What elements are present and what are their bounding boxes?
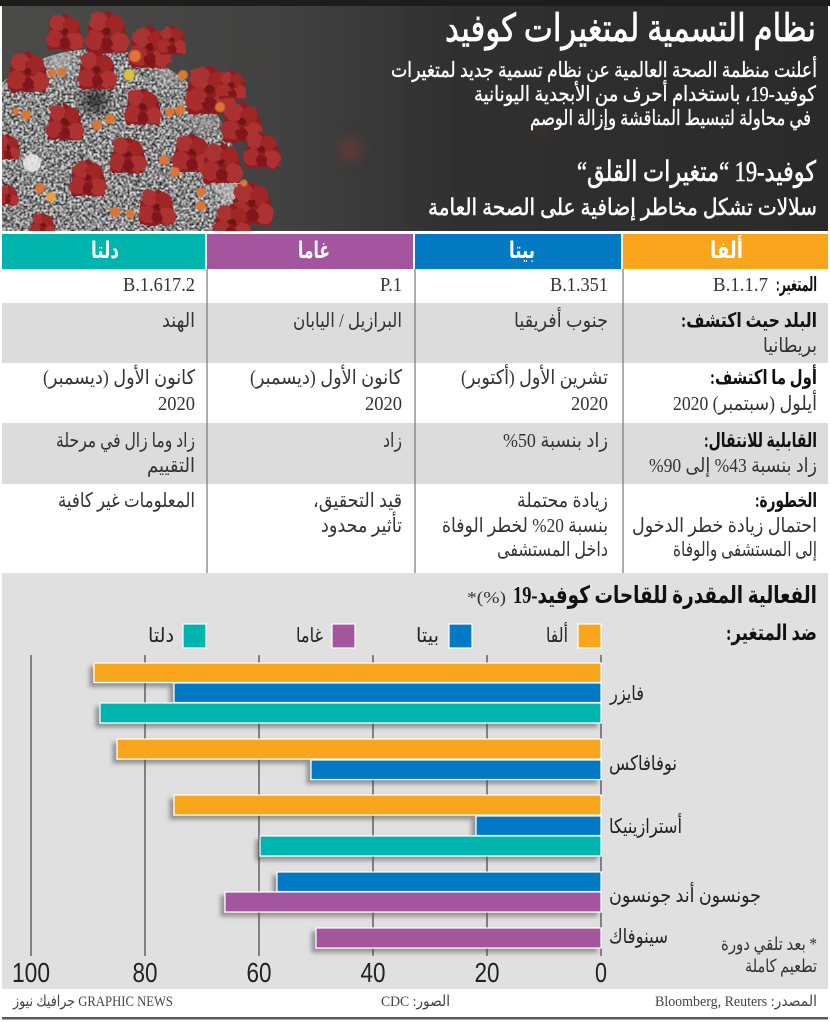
row: severity: داخل المستشفى [497, 539, 608, 561]
row: severity [58, 490, 817, 562]
header: alpha: ألفا [710, 234, 743, 263]
row: variant [123, 274, 817, 296]
footnote [721, 934, 817, 977]
subheading: كوفيد-19 “متغيرات القلق“ [577, 157, 817, 188]
row: transmissibility: زاد [383, 430, 402, 452]
legend: دلتا [148, 625, 174, 647]
row: severity: بنسبة 20% لخطر الوفاة [442, 515, 608, 537]
legend [148, 620, 817, 648]
unit note: *(%) [467, 588, 506, 607]
header: gamma [207, 234, 413, 269]
axis numbers: 100 [12, 957, 50, 988]
axis numbers: 60 [246, 957, 272, 988]
photo credit: الصور: CDC [381, 994, 450, 1010]
vaccine labels [609, 683, 761, 948]
vaccine labels: نوفافاكس [609, 753, 677, 775]
legend: ألفا [546, 622, 568, 647]
header: delta [2, 234, 205, 269]
footer [2, 994, 828, 1020]
row: first detected: كانون الأول (ديسمبر) [43, 365, 195, 389]
row: country: جنوب أفريقيا [514, 307, 608, 332]
source: المصدر: Bloomberg, Reuters [655, 994, 817, 1010]
header panel [0, 0, 830, 240]
vaccine labels: أسترازينيكا [609, 813, 682, 838]
row: first detected: أيلول (سبتمبر) 2020 [673, 390, 817, 415]
row: severity: زيادة محتملة [517, 490, 608, 512]
row: variant: P.1 [380, 274, 402, 296]
publisher: GRAPHIC NEWS جرافيك نيوز [12, 994, 173, 1010]
axis numbers: 80 [132, 957, 158, 988]
header: beta [415, 234, 621, 269]
intro text [391, 56, 817, 131]
row: variant: B.1.617.2 [123, 274, 195, 296]
legend: بيتا [416, 625, 439, 647]
row: first detected: كانون الأول (ديسمبر) [250, 365, 402, 389]
vaccine labels: سينوفاك [609, 926, 668, 948]
row: transmissibility [56, 430, 817, 478]
chart panel [2, 573, 828, 989]
virus illustration [0, 10, 546, 240]
row: first detected [43, 363, 817, 415]
row: country: بريطانيا [763, 335, 817, 357]
table [2, 234, 828, 573]
header: delta: دلتا [91, 238, 119, 263]
intro text: كوفيد-19، باستخدام أحرف من الأبجدية اليونانية [474, 80, 816, 106]
header: gamma: غاما [298, 238, 330, 263]
axis numbers: 40 [360, 957, 386, 988]
row: severity: المعلومات غير كافية [58, 490, 195, 512]
row: country: الهند [162, 310, 195, 332]
axis numbers: 0 [595, 957, 607, 988]
row: country: البرازيل / اليابان [293, 310, 402, 332]
header: alpha [623, 234, 828, 269]
row: first detected: 2020 [158, 393, 195, 415]
vaccine labels: جونسون أند جونسون [609, 882, 761, 907]
bar chart [94, 663, 601, 948]
row: country [162, 307, 817, 357]
row: first detected: 2020 [365, 393, 402, 415]
header: beta: بيتا [509, 238, 535, 263]
row: first detected: 2020 [571, 393, 608, 415]
row: severity: قيد التحقيق، [313, 490, 402, 512]
row: variant: B.1.351 [550, 274, 608, 296]
legend: غاما [296, 625, 323, 647]
row: transmissibility: زاد بنسبة 43% إلى 90% [649, 455, 817, 478]
row: severity: تأثير محدود [321, 511, 402, 537]
row: first detected: تشرين الأول (أكتوبر) [461, 364, 608, 389]
row: transmissibility: زاد وما زال في مرحلة [56, 430, 195, 453]
vaccine labels: فايزر [609, 683, 644, 705]
row: variant: B.1.1.7 [713, 274, 768, 296]
axis numbers: 20 [474, 957, 500, 988]
axis numbers [12, 957, 607, 988]
row: transmissibility: زاد بنسبة 50% [503, 430, 608, 452]
row: transmissibility: التقييم [147, 455, 195, 477]
